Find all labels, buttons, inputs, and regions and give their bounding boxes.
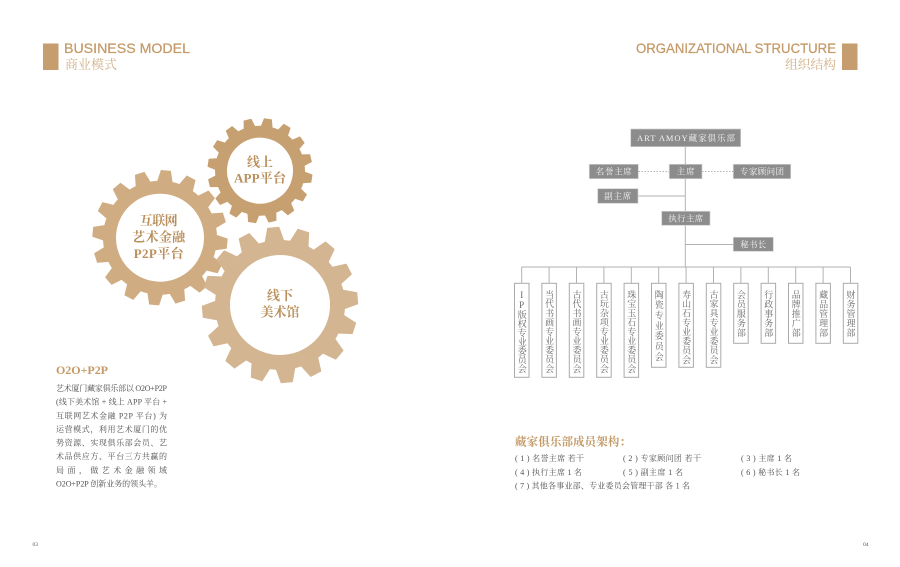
gear: offline art museum: 线下 [267, 288, 294, 303]
gear: offline art museum: 美术馆 [260, 304, 300, 320]
gear: internet art finance P2P platform: P2P平台 [134, 246, 185, 261]
box: executive chairman: 执行主席 [668, 214, 704, 224]
text block: member list: ( 2 ) 专家顾问团 若干 [623, 453, 701, 463]
heading: club member structure: 藏家俱乐部成员架构： [515, 434, 631, 448]
dept: brand promotion: 品牌推广部 [791, 290, 801, 338]
header: business model: 商业模式 [65, 57, 117, 72]
text block: member list: ( 6 ) 秘书长 1 名 [741, 467, 800, 477]
text block: member list: ( 7 ) 其他各事业部、专业委员会管理干部 各 1 名 [515, 481, 690, 491]
header: organizational structure [636, 40, 858, 72]
page number 03: 03 [32, 542, 38, 548]
committee: shoushan stone: 寿山石专业委员会 [681, 289, 691, 365]
committee: jewelry [624, 283, 639, 377]
text block: business model description: 艺术厦门藏家俱乐部以 O2O+P2P [56, 383, 168, 393]
gear: online app platform: 线上 [247, 154, 273, 170]
box: vice chairman: 副主席 [604, 191, 632, 201]
box: secretary general [733, 237, 773, 251]
gear: online app platform [200, 111, 320, 231]
dept: member services [734, 283, 748, 343]
committee: contemporary painting: 当代书画专业委员会 [544, 289, 554, 374]
committee: antique furniture [706, 283, 721, 367]
box: expert advisors: 专家顾问团 [740, 166, 784, 176]
gear: internet art finance P2P platform [87, 165, 233, 311]
text block: business model description: (线下美术馆 + 线上 APP 平台 + [56, 397, 167, 407]
committee: antiques: 古玩杂项专业委员会 [598, 289, 609, 374]
gear: internet art finance P2P platform: 互联网 [140, 213, 178, 228]
header: business model [43, 40, 190, 72]
dept: member services: 会员服务部 [735, 289, 746, 338]
committee: IP: IP版权专业委员会 [516, 290, 527, 374]
committee: ceramics [652, 283, 666, 367]
dept: finance: 财务管理部 [846, 289, 856, 338]
text block: member list: ( 1 ) 名誉主席 若干 [515, 453, 584, 463]
gear: online app platform: APP平台 [234, 170, 287, 186]
dept: administration [761, 283, 776, 343]
committee: shoushan stone [679, 283, 693, 367]
committee: jewelry: 珠宝玉石专业委员会 [626, 289, 636, 374]
dept: administration: 行政事务部 [763, 289, 773, 338]
dept: collection management: 藏品管理部 [818, 289, 828, 338]
text block: member list [515, 453, 800, 491]
committee: antique furniture: 古家具专业委员会 [708, 289, 718, 365]
committee: ancient painting [569, 283, 584, 377]
header: organizational structure: ORGANIZATIONAL STRUCTURE [636, 40, 836, 56]
dept: brand promotion [788, 283, 803, 343]
box: vice chairman [598, 189, 638, 203]
committee: IP [514, 283, 529, 377]
page number 04: 04 [863, 542, 869, 548]
text block: business model description: 互联网艺术金融 P2P 平台) 为 [56, 411, 167, 421]
box: expert advisors [733, 164, 791, 179]
box: honorary chairman [589, 164, 638, 179]
gear: offline art museum [195, 220, 365, 390]
text block: business model description: 局面，做艺术金融领域 [56, 465, 167, 476]
gear: internet art finance P2P platform: 艺术金融 [132, 230, 186, 244]
text block: member list: ( 3 ) 主席 1 名 [741, 453, 792, 463]
box: secretary general: 秘书长 [740, 240, 767, 250]
text block: member list: ( 4 ) 执行主席 1 名 [515, 467, 582, 477]
committee: ceramics: 陶瓷专业委员会 [653, 290, 664, 362]
text block: business model description [56, 383, 168, 488]
heading: O2O+P2P: O2O+P2P [56, 363, 108, 377]
committee: contemporary painting [542, 283, 556, 377]
dept: finance [843, 283, 858, 343]
connector lines [522, 146, 850, 283]
committee: ancient painting: 古代书画专业委员会 [571, 289, 582, 374]
box: chairman: 主席 [677, 166, 695, 176]
text block: business model description: 术品供应方、平台三方共赢的 [56, 451, 167, 461]
box: ART AMOY collectors club [631, 129, 741, 147]
text block: business model description: 运营模式，利用艺术厦门的优 [56, 424, 167, 435]
box: executive chairman [662, 211, 710, 225]
box: honorary chairman: 名誉主席 [596, 166, 632, 176]
header: business model: BUSINESS MODEL [64, 40, 190, 56]
dept: collection management [816, 283, 830, 343]
org chart [514, 129, 858, 377]
text block: business model description: 势资源、实现俱乐部会员、艺 [56, 438, 167, 448]
text block: business model description: O2O+P2P 创新业务的领头羊。 [56, 478, 162, 488]
committee: antiques [597, 283, 611, 377]
box: chairman [669, 164, 702, 179]
header: organizational structure: 组织结构 [785, 57, 836, 72]
box: ART AMOY collectors club: ART AMOY藏家俱乐部 [637, 133, 735, 143]
text block: member list: ( 5 ) 副主席 1 名 [623, 467, 683, 477]
